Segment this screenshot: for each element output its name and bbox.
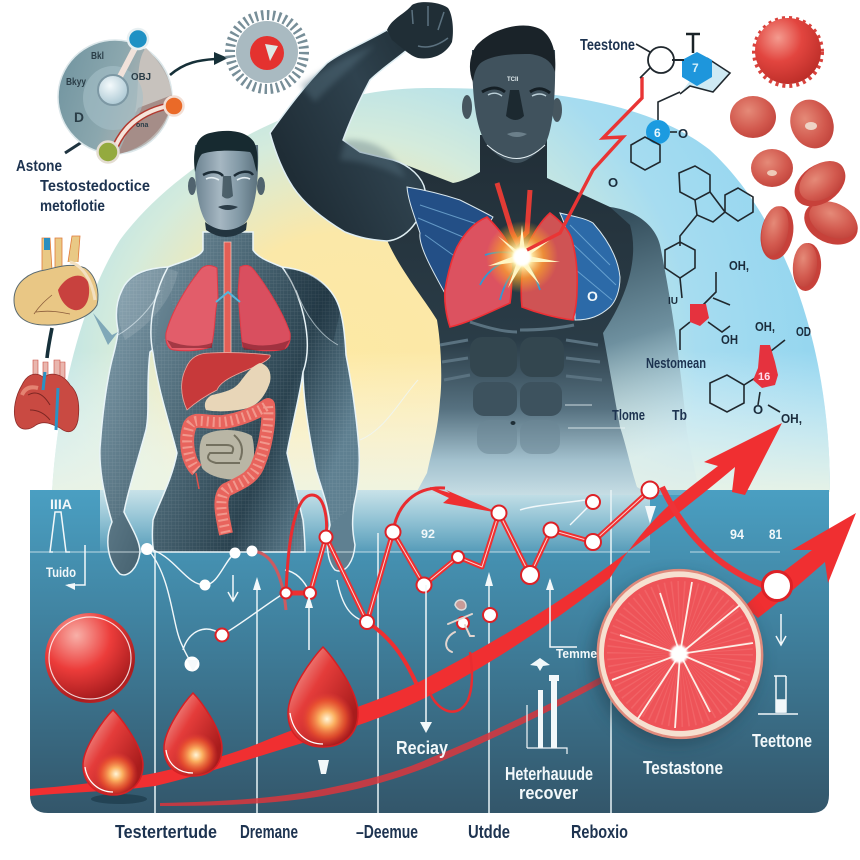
panel labels: Tuido	[46, 564, 76, 580]
left figure small intestine	[199, 430, 254, 480]
blue pectoral muscles	[407, 187, 620, 320]
molecule lower ring: OH,	[755, 319, 775, 334]
panel labels	[46, 496, 812, 803]
axis labels	[115, 822, 628, 842]
white connector curves	[147, 500, 590, 665]
molecule lower ring: OD	[796, 324, 811, 339]
icon: blood drop 1	[83, 710, 147, 804]
dial labels: D	[74, 109, 84, 125]
left figure large intestine	[187, 405, 268, 534]
panel labels: Temme	[556, 646, 597, 661]
chart panel	[30, 490, 829, 813]
arrow into peak	[430, 487, 499, 513]
pointer line to caption	[65, 142, 82, 153]
caption: top left: Testostedoctice	[40, 178, 150, 195]
axis labels: Dremane	[240, 822, 298, 842]
label pair	[612, 407, 687, 424]
panel labels: recover	[519, 783, 578, 803]
icon: blood ball	[45, 613, 135, 703]
connector between organs	[47, 328, 52, 358]
red lightning line to molecule	[527, 77, 642, 250]
dial labels	[66, 51, 151, 129]
falling arc to big node	[662, 487, 765, 586]
raised arm	[270, 30, 425, 241]
panel labels: Heterhauude	[505, 764, 593, 784]
panel labels: IIIA	[50, 496, 72, 512]
dial disc	[58, 40, 172, 154]
left figure head	[188, 131, 265, 237]
panel labels: Reciay	[396, 738, 448, 758]
left figure stomach	[205, 363, 271, 411]
caption: top left	[16, 158, 150, 215]
dial arms	[113, 46, 136, 90]
molecule red node: OH	[721, 332, 738, 347]
icon: blood drop 2	[164, 693, 222, 777]
lungs with glow	[445, 183, 577, 327]
panel grid lines	[30, 490, 780, 813]
head	[462, 26, 562, 163]
icon: blood drop 3	[288, 647, 358, 747]
molecule red node: OH,	[729, 258, 749, 273]
molecule red node: IU	[668, 296, 678, 307]
axis labels: Utdde	[468, 822, 510, 842]
molecule label O: O	[608, 175, 618, 190]
red ringed nodes	[216, 482, 792, 642]
left figure windpipe	[216, 242, 240, 354]
arrow to virus	[170, 52, 228, 75]
left figure liver	[182, 353, 270, 410]
icon: anatomical heart	[14, 360, 79, 432]
dial labels: Bkl	[91, 51, 104, 62]
dial labels: OBJ	[131, 72, 151, 83]
big red arrow 1	[30, 423, 782, 796]
icon: arrow heads	[65, 506, 656, 774]
falling curve from trough	[367, 622, 417, 685]
figure: anatomical man, left	[100, 131, 359, 575]
molecule label: nest: Nestomean	[646, 355, 706, 372]
molecule diagrams	[580, 34, 811, 426]
icon: grapefruit	[579, 552, 781, 756]
node blue	[128, 29, 148, 49]
white nodes	[141, 543, 258, 672]
red blood cells	[730, 18, 860, 292]
node green	[98, 142, 118, 162]
icon: spiked cell	[230, 15, 304, 89]
icon: bar chart	[527, 675, 567, 754]
panel labels: 92	[421, 527, 435, 541]
axis labels: Reboxio	[571, 822, 628, 842]
icon: organ cross-section	[14, 236, 98, 358]
arm muscle highlight	[300, 45, 405, 178]
body pointers	[360, 380, 625, 440]
big red arrow 2	[160, 513, 856, 806]
label pair: Tb	[672, 407, 687, 424]
molecule top ring: 7	[692, 61, 699, 75]
line chart	[141, 482, 792, 712]
molecule red node	[668, 258, 749, 350]
lower loop	[430, 652, 472, 712]
left figure body	[100, 232, 359, 575]
icon: small figure	[446, 600, 474, 652]
molecule lower ring	[710, 319, 811, 426]
axis labels: Testertertude	[115, 822, 217, 842]
glow star	[486, 221, 560, 293]
right arm fade	[600, 207, 700, 495]
panel labels: Testastone	[643, 758, 723, 778]
label pair: Tlome	[612, 407, 645, 424]
molecule polycyclic rings	[665, 166, 753, 298]
molecule label: top: Teestone	[580, 37, 635, 54]
caption: top left: metoflotie	[40, 198, 105, 215]
caption: top left: Astone	[16, 158, 62, 175]
panel labels: Teettone	[752, 731, 812, 751]
molecule blue node six: O	[678, 126, 688, 141]
faded red link	[252, 551, 286, 610]
abdominal muscles	[440, 322, 602, 454]
panel labels: 94	[730, 526, 744, 542]
dial labels: ona	[136, 122, 149, 129]
dial labels: Bkyy	[66, 77, 86, 88]
molecule blue node six	[631, 92, 688, 170]
fist	[387, 2, 453, 58]
node orange	[164, 96, 184, 116]
tablet shaped cells	[797, 193, 860, 253]
pointer to figure	[93, 313, 118, 345]
zigzag series	[286, 490, 650, 622]
molecule top ring	[636, 34, 730, 94]
molecule lower ring: OH,	[781, 411, 802, 426]
torso	[375, 135, 650, 495]
red loops	[286, 488, 445, 593]
axis labels: –Deemue	[356, 822, 418, 842]
icon: small arrows	[50, 512, 786, 728]
dial diagram	[58, 29, 184, 162]
panel labels: 81	[769, 526, 782, 542]
figure: flexing man, right	[270, 2, 700, 495]
muscle label: O	[587, 288, 598, 304]
left figure lungs	[166, 265, 290, 351]
large spiked cell	[754, 18, 822, 86]
dial knob	[98, 75, 128, 105]
head: TCII	[507, 77, 519, 83]
molecule lower ring: 16	[758, 371, 770, 383]
molecule blue node six: 6	[654, 126, 661, 140]
small round cells	[730, 96, 776, 138]
background arch	[52, 88, 830, 492]
molecule lower ring: O	[753, 402, 763, 417]
dial slices	[135, 48, 172, 112]
icon: beaker	[758, 676, 798, 714]
